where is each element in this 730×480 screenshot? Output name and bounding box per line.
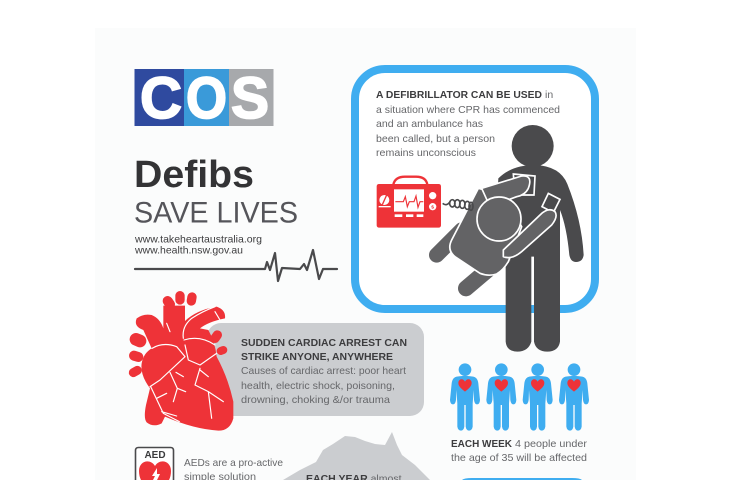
subheading: save lives: SAVE LIVES — [134, 196, 298, 230]
logo: COS: O — [186, 66, 227, 131]
website links: www.health.nsw.gov.au — [134, 244, 243, 256]
panel text: STRIKE ANYONE, ANYWHERE — [241, 351, 393, 363]
icon: coiled cable — [443, 200, 473, 210]
text: AEDs solution: AEDs are a pro-active — [184, 457, 283, 469]
website links: www.takeheartaustralia.org — [134, 234, 262, 246]
person 3 — [523, 363, 553, 431]
logo: COS: C — [140, 66, 182, 131]
panel text: drowning, choking &/or trauma — [241, 394, 390, 406]
logo: COS — [134, 66, 274, 131]
icon: rescuer holding patient — [437, 125, 584, 352]
text: each week: 4 people under — [515, 438, 588, 450]
panel text: health, electric shock, poisoning, — [241, 380, 395, 392]
person 4 — [559, 363, 589, 431]
panel text: remains unconscious — [376, 147, 476, 159]
icon: defibrillator machine: $ — [431, 204, 434, 210]
person 2 — [486, 363, 516, 431]
heading: Defibs: Defibs — [134, 154, 254, 196]
panel text: a situation where CPR has commenced — [376, 104, 560, 116]
panel text: A DEFIBRILLATOR CAN BE USED — [376, 89, 542, 101]
panel text: SUDDEN CARDIAC ARREST CAN — [241, 337, 407, 349]
map: Australia — [283, 432, 430, 480]
panel: sudden cardiac arrest — [207, 323, 424, 416]
ecg line — [135, 250, 337, 281]
text: AEDs solution — [184, 457, 283, 480]
text: each week: EACH WEEK — [451, 438, 512, 450]
logo: COS: S — [231, 66, 269, 131]
website links — [134, 234, 262, 256]
icon: anatomical heart — [133, 296, 233, 431]
panel: defibrillator — [355, 69, 595, 352]
text: each week: the age of 35 will be affected — [451, 452, 587, 464]
panel text — [241, 337, 407, 406]
panel text: been called, but a person — [376, 133, 495, 145]
panel text: and an ambulance has — [376, 118, 483, 130]
panel text: in — [545, 89, 553, 101]
icon: defibrillator machine — [377, 177, 441, 228]
text: each week — [451, 438, 588, 464]
icon: AED sign — [136, 448, 174, 480]
person 1 — [450, 363, 480, 431]
blue panel top — [462, 478, 582, 480]
panel text — [376, 89, 560, 159]
panel text: Causes of cardiac arrest: poor heart — [241, 365, 406, 377]
icon row: four people with hearts — [450, 363, 589, 431]
icon: AED sign: AED — [144, 450, 166, 461]
